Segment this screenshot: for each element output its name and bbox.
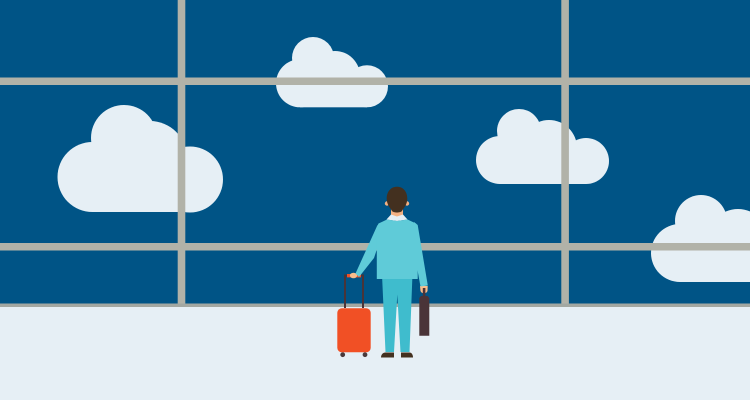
sky background xyxy=(0,0,750,304)
floor xyxy=(0,304,750,400)
right hand xyxy=(420,286,428,293)
shoes xyxy=(381,352,413,358)
suitcase wheels xyxy=(340,352,367,357)
cloud: right centre xyxy=(476,109,609,184)
cloud: large left xyxy=(58,105,223,212)
neck xyxy=(391,208,403,217)
suitcase handle xyxy=(345,276,363,308)
window frame xyxy=(0,0,750,304)
suitcase body xyxy=(337,308,371,352)
suitcase xyxy=(337,274,371,357)
left arm xyxy=(356,225,380,277)
jacket xyxy=(377,220,418,279)
suitcase grip xyxy=(347,274,361,277)
briefcase xyxy=(419,288,429,336)
person xyxy=(350,187,428,358)
head hair xyxy=(387,187,407,212)
left hand xyxy=(350,273,357,278)
cloud: far right xyxy=(651,195,750,282)
trousers xyxy=(382,279,412,352)
collar xyxy=(386,214,408,221)
right arm xyxy=(412,222,428,286)
cloud: top centre xyxy=(276,37,388,107)
ears xyxy=(385,201,409,206)
